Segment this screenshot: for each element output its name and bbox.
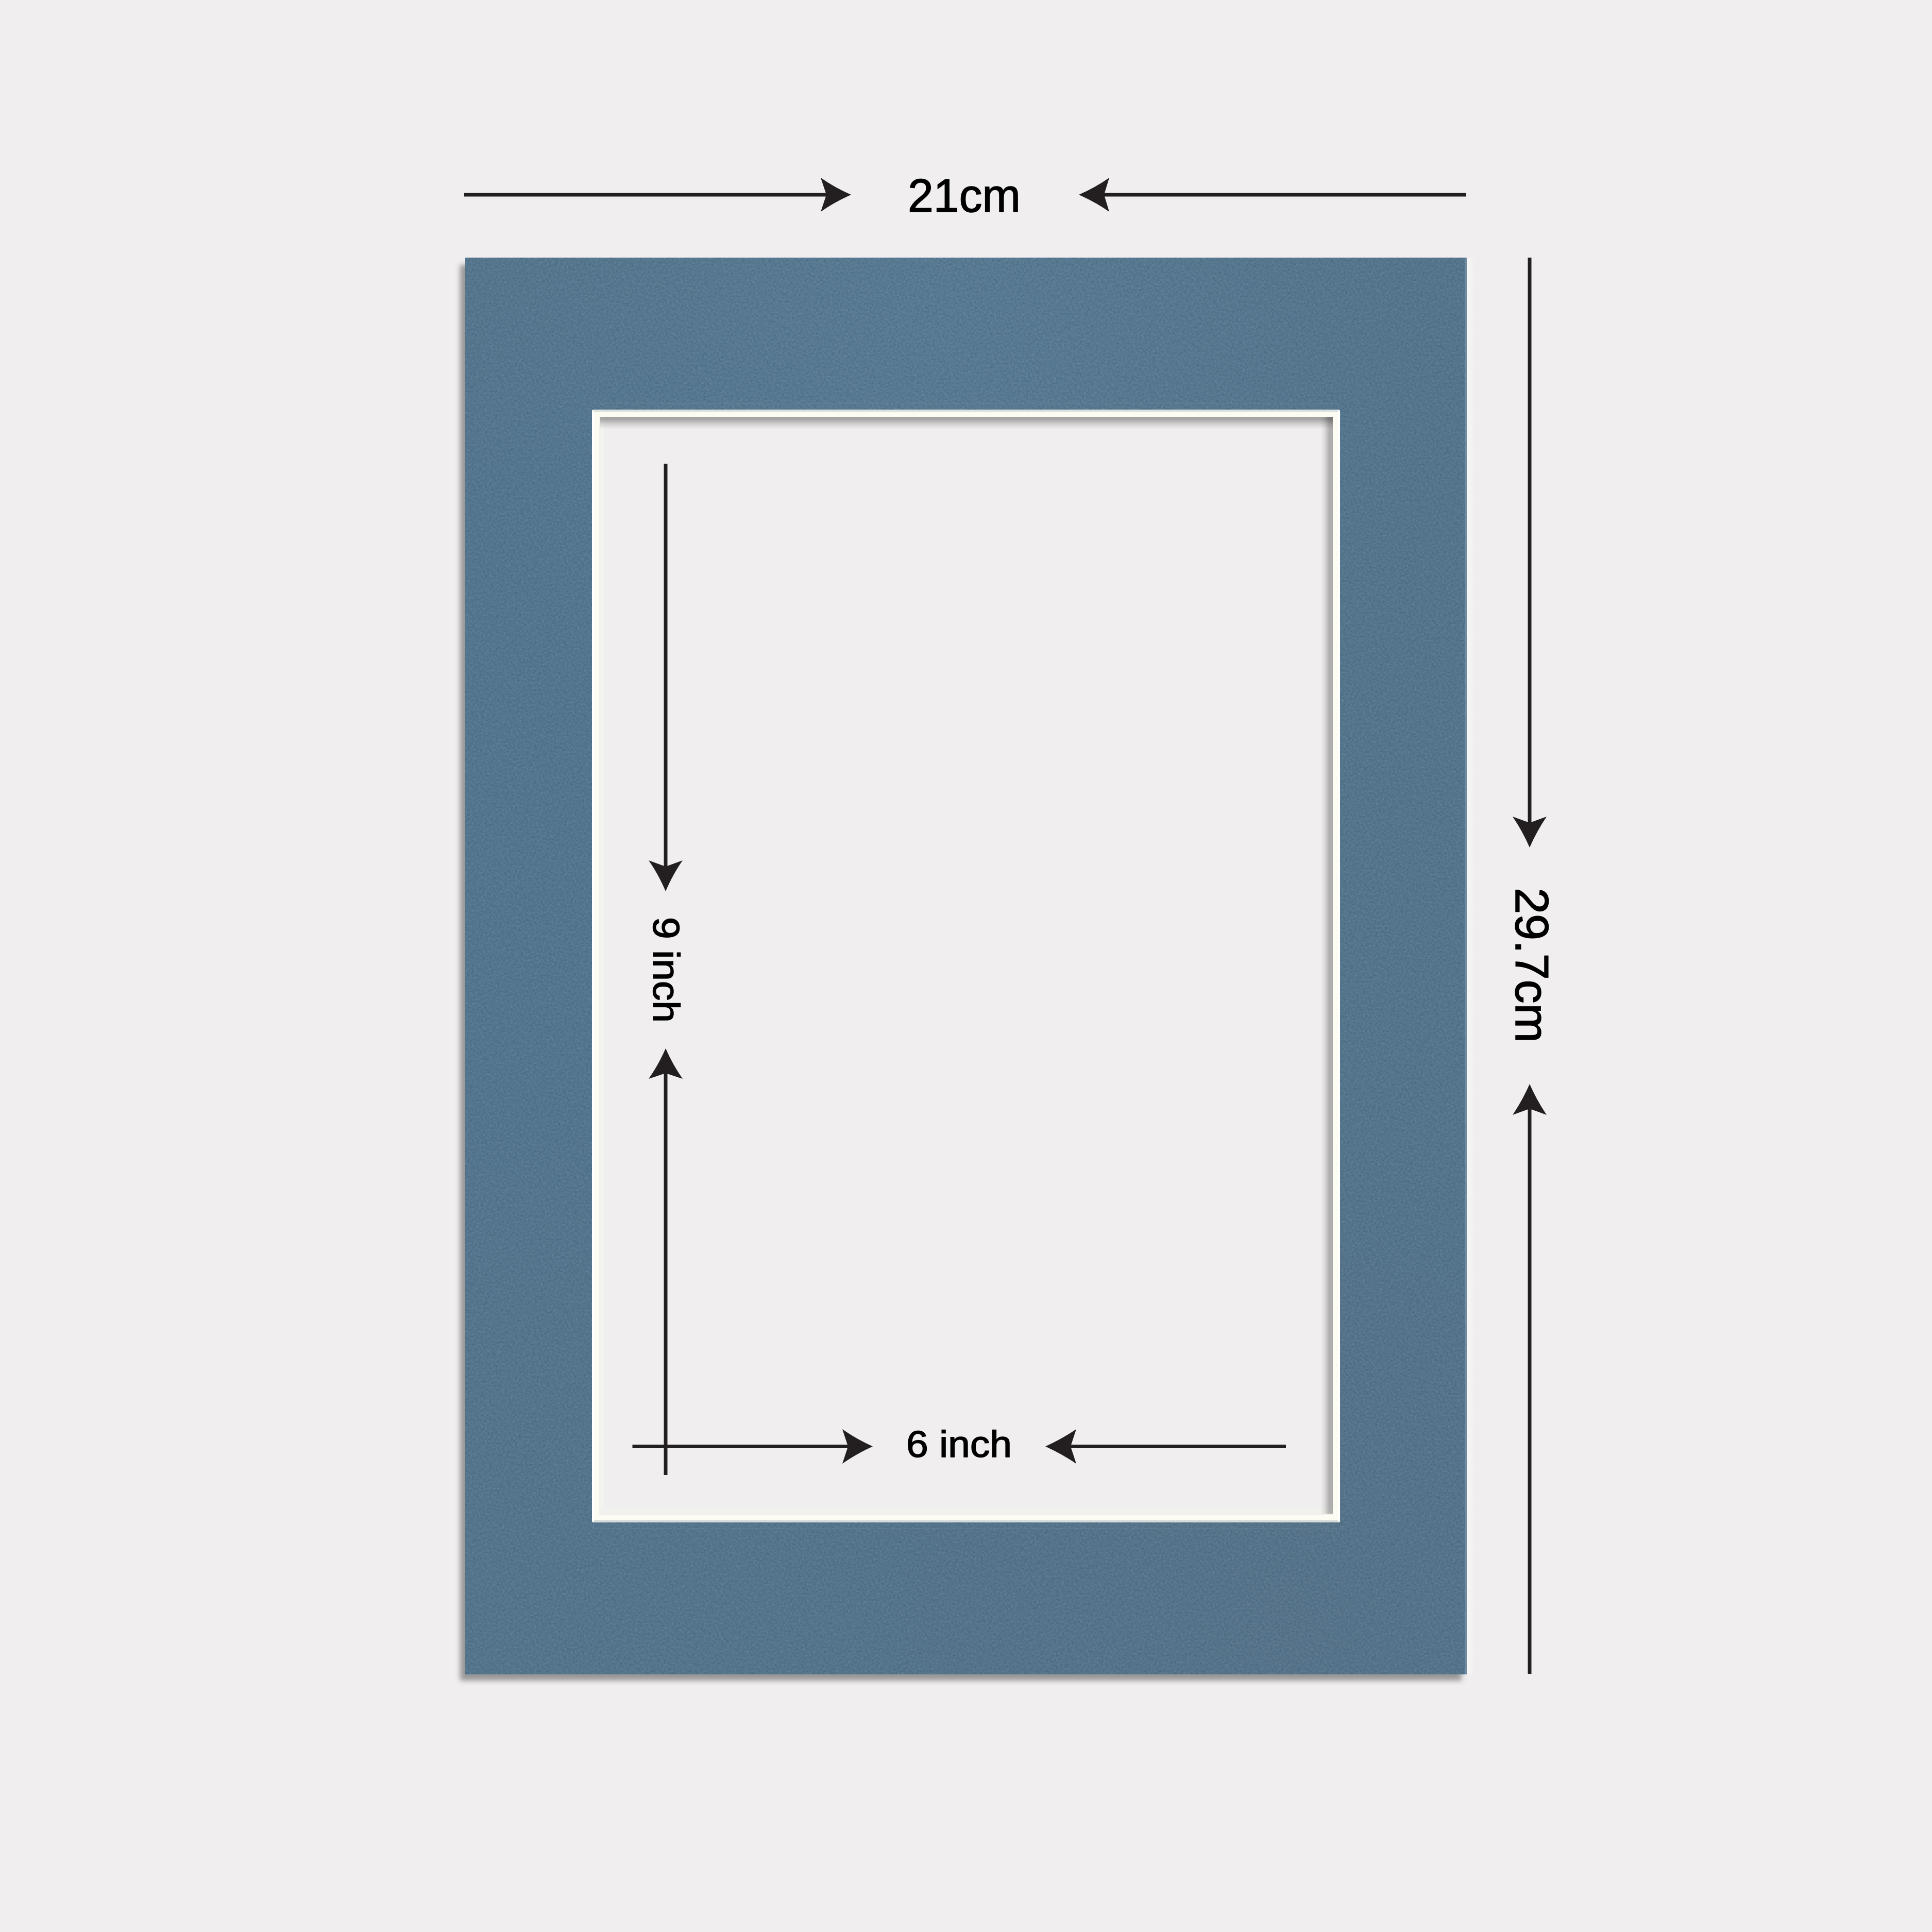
label: 9 inch: 9 inch bbox=[645, 917, 686, 1023]
arrow: 21cm right bbox=[1079, 178, 1466, 212]
label: 6 inch: 6 inch bbox=[906, 1424, 1012, 1465]
arrow: 21cm left bbox=[464, 178, 851, 212]
dimension: 21cm width bbox=[464, 170, 1466, 222]
dimension: 6 inch width bbox=[633, 1424, 1286, 1465]
dimension: 9 inch height bbox=[645, 464, 686, 1475]
arrow: 9 inch up bbox=[649, 1048, 683, 1475]
label: 29.7cm: 29.7cm bbox=[1505, 888, 1557, 1043]
arrow: 9 inch down bbox=[649, 464, 683, 891]
arrow: 29.7cm up bbox=[1513, 1084, 1547, 1674]
label: 21cm: 21cm bbox=[908, 170, 1021, 222]
arrow: 6 inch left bbox=[1045, 1429, 1286, 1464]
window opening with cream bevel bbox=[592, 410, 1340, 1522]
mount drop shadow bbox=[460, 265, 1462, 1681]
mount board bbox=[465, 258, 1467, 1674]
mount right edge glow bbox=[1467, 258, 1475, 1674]
arrow: 6 inch right bbox=[633, 1429, 873, 1464]
arrow: 29.7cm down bbox=[1513, 258, 1547, 848]
panel: blue picture mount bbox=[460, 258, 1475, 1681]
dimension: 29.7cm height bbox=[1505, 258, 1557, 1674]
